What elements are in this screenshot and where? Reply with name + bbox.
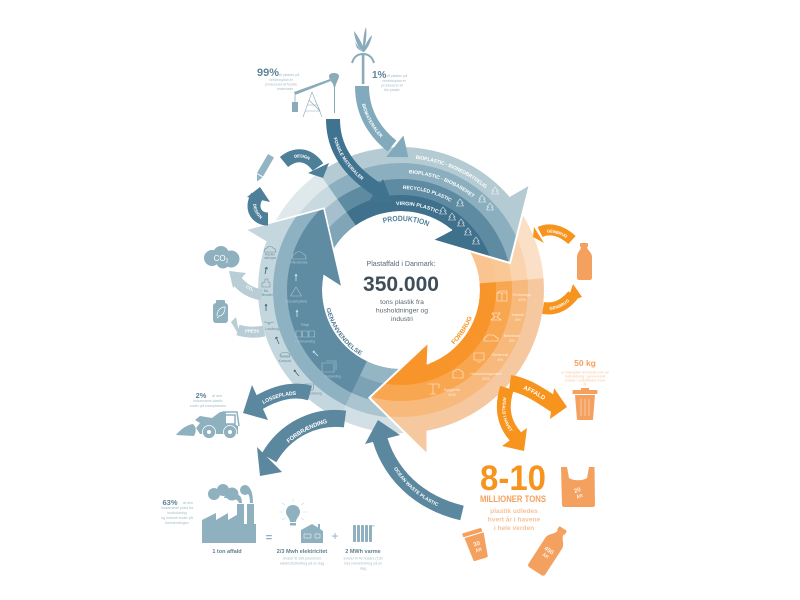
- icon: cup 30 years: [462, 527, 491, 562]
- icons and labels: forbrug sectors: Elektronik: [492, 353, 508, 357]
- arrow: fossile materialer: FOSSILE MATERIALER: [334, 137, 364, 180]
- icon: co2 cloud: [204, 246, 240, 268]
- icons and labels: forbrug sectors: Industri: [512, 313, 524, 317]
- arrow: genbrug bottom: GENBRUG: [550, 299, 570, 310]
- icons and labels: recycling outer band: raffinaderi: [259, 293, 273, 297]
- icons and labels: recycling outer band: Råolie/: [265, 252, 275, 256]
- icons and labels: recycling inner band: Råmateriale: [290, 260, 308, 264]
- icons and labels: recycling outer band: [259, 246, 322, 396]
- stat: 2 percent landfill: af den: [212, 394, 222, 398]
- center description: tons plastik fra: [380, 299, 424, 306]
- arrow: affald i havet: AFFALD I HAVET: [502, 397, 513, 432]
- label: heating: 2 MWh varme: [345, 549, 381, 555]
- icon: bottle 450 years: [527, 523, 572, 577]
- stat: 99 percent fossil: produceret af fossile: [265, 82, 297, 86]
- icon: trash can: [572, 388, 598, 420]
- icon: factory: [202, 484, 256, 543]
- icon: plastic bag 20 years: 20: [573, 487, 582, 495]
- stat: 63 percent incineration: og industri ender på: [161, 516, 193, 520]
- stat: 50 kg: smider i restaffaldet hvert: [565, 378, 605, 382]
- icons and labels: recycling inner band: Tilføje: [301, 323, 310, 327]
- stat: 63 percent incineration: husholdning: [167, 511, 187, 515]
- icons and labels: forbrug sectors: 8%: [515, 318, 521, 322]
- icon: plastic bag 20 years: [561, 467, 595, 507]
- stat: 50 kg: 50 kg: [574, 358, 596, 368]
- panel: genanvendelse arrow: [247, 207, 460, 433]
- icon: sugar cane: [352, 27, 374, 84]
- description: i hele verden: [494, 525, 534, 532]
- icon: gas canister: [213, 300, 228, 323]
- stat: 63 percent incineration: forbrændingen: [165, 521, 189, 525]
- stat: 1 percent bio: produceret af: [381, 84, 403, 88]
- stat: 63 percent incineration: [161, 498, 193, 525]
- arrow: affald: AFFALD: [523, 386, 546, 400]
- arrow: co2: CO₂: [246, 286, 254, 292]
- icons and labels: recycling inner band: Indsamling: [325, 374, 341, 378]
- panel: forbrug arrow: [368, 173, 544, 452]
- label: 1 ton affald: 1 ton affald: [212, 549, 242, 555]
- icon: light bulb: [279, 499, 307, 526]
- label: bioplastic bionedbrydelig: BIOPLASTIC - BIONEDBRYDELIG: [416, 155, 487, 188]
- stat: 50 kg: er mængden af plastik som en: [561, 370, 609, 374]
- stat: 63 percent incineration: 63%: [162, 498, 178, 507]
- circular lifecycle diagram: [247, 147, 544, 452]
- heading: produktion: PRODUKTION: [382, 216, 430, 226]
- center description: husholdninger og: [376, 308, 428, 314]
- icon: co2 cloud: CO: [214, 254, 226, 263]
- label: bioplastic biobaseret: BIOPLASTIC - BIOBASERET: [409, 170, 475, 197]
- stat: 1 percent bio: af plasten på: [387, 74, 407, 78]
- arrow: forbrænding: [257, 410, 346, 476]
- stat: 1 percent bio: verdensplan er: [382, 79, 407, 83]
- heading: genanvendelse: GENANVENDELSE: [326, 308, 363, 356]
- label: heating: [343, 549, 383, 570]
- label: heating: m2) varmeforbrug på en: [344, 562, 382, 566]
- icon: pencil: [257, 154, 274, 182]
- arrow: design left: [247, 187, 270, 226]
- arrow: press: PRESS: [245, 330, 259, 332]
- arrow: fossile materialer: [326, 119, 390, 200]
- arrow: affald i havet: [496, 386, 527, 451]
- icon: bottle 450 years: ÅR: [541, 551, 551, 560]
- icons and labels: forbrug sectors: Husholdningsvarer: [470, 372, 503, 376]
- stat: 2 percent landfill: indsamlede plastic: [193, 399, 223, 403]
- label: electricity: elektricitetforbrug på en dag: [280, 562, 324, 566]
- icons and labels: forbrug sectors: 22%: [482, 377, 490, 381]
- icon: cup 30 years: 30: [473, 541, 482, 549]
- icon: plastic bag 20 years: ÅR: [575, 492, 584, 500]
- subheading: MILLIONER TONS: [480, 494, 546, 504]
- icons and labels: forbrug sectors: Bilindustri: [504, 334, 520, 338]
- arrow: biomaterialer: [355, 86, 408, 158]
- stat: 63 percent incineration: indsamlede plast fra: [161, 506, 193, 510]
- description: hvert år i havene: [488, 516, 541, 524]
- icon: house: [301, 524, 323, 543]
- arrow: co2: [229, 271, 262, 300]
- icons and labels: recycling inner band: Granulat/pellets: [285, 300, 308, 304]
- icon: radiator: [353, 525, 374, 542]
- icon: bottle 450 years: 450: [543, 546, 555, 557]
- icons and labels: forbrug sectors: 6%: [509, 339, 515, 343]
- big number: 8-10: [480, 459, 546, 498]
- heading: forbrug: FORBRUG: [451, 316, 472, 344]
- arrow: design left: DESIGN: [253, 204, 262, 219]
- icon: co2 cloud: 2: [226, 258, 229, 264]
- stat: 8-10 million tons: [480, 459, 546, 532]
- stat: 99 percent fossil: 99%: [257, 67, 279, 79]
- arrow: press: [231, 317, 266, 338]
- stat: 1 percent bio: bio plastic: [384, 88, 400, 92]
- arrow: ocean waste plastic: [365, 420, 464, 520]
- label: electricity: 2/3 Mwh elektricitet: [277, 549, 327, 555]
- stat: 50 kg: [561, 358, 609, 386]
- stat: 2 percent landfill: ender på lossepladsen: [190, 404, 226, 408]
- arrow: affald: [509, 375, 567, 419]
- stat: 99 percent fossil: [257, 67, 299, 91]
- icon: wheel loader: [176, 412, 239, 438]
- icon: cup 30 years: ÅR: [474, 545, 483, 553]
- label: electricity: [277, 549, 327, 566]
- arrow: design top: DESIGN: [294, 154, 310, 160]
- icons and labels: forbrug sectors: Emballage: [513, 293, 531, 297]
- arrow: genbrug top: [533, 224, 576, 244]
- description: plastik udledes: [490, 508, 538, 515]
- center description: industri: [391, 316, 413, 323]
- icons and labels: forbrug sectors: [428, 291, 531, 397]
- stat: 50 kg: husholdning i gennemsnit: [565, 374, 605, 378]
- stat: 2 percent landfill: 2%: [196, 391, 207, 400]
- label: electricity: Svarer til 100 personers: [283, 556, 321, 560]
- arrow: design top: [280, 149, 329, 178]
- icons and labels: recycling inner band: Forbehandling: [295, 340, 315, 344]
- stat: 99 percent fossil: af plasten på: [279, 73, 299, 77]
- center statistic: [363, 259, 439, 323]
- production arrow tail: [258, 176, 356, 282]
- label: virgin plastic: VIRGIN PLASTIC: [396, 202, 439, 213]
- icons and labels: recycling outer band: Kompost: [279, 359, 291, 363]
- icons and labels: forbrug sectors: 4%: [497, 358, 503, 362]
- stat: 1 percent bio: [372, 70, 407, 92]
- arrow: forbrænding: FORBRÆNDING: [286, 419, 327, 443]
- icon: equals: =: [266, 532, 272, 544]
- label: heating: Svarer til 40 husars (130: [343, 556, 383, 560]
- label: heating: dag: [360, 566, 366, 570]
- center heading: Plastaffald i Danmark:: [366, 259, 436, 268]
- icons and labels: recycling outer band: Bio: [264, 289, 269, 293]
- stat: 2 percent landfill: [190, 391, 226, 408]
- arrow: genbrug bottom: [542, 284, 582, 314]
- icon: bottle: [577, 243, 592, 280]
- icon: oil pump: [292, 73, 339, 117]
- icons and labels: forbrug sectors: 40%: [518, 298, 526, 302]
- icon: plus: +: [331, 529, 339, 543]
- icons and labels: recycling outer band: naturgas: [264, 256, 277, 260]
- icons and labels: recycling outer band: Landbrug: [265, 327, 279, 331]
- icons: plastic band recycling marks: [440, 187, 498, 244]
- panel: produktion arrow: [322, 147, 528, 264]
- icons and labels: recycling outer band: Sortering: [309, 392, 322, 396]
- stat: 50 kg: år: [583, 382, 587, 386]
- stat: 1 percent bio: 1%: [372, 70, 387, 81]
- arrow: losseplads: [243, 384, 312, 420]
- arrow: genbrug top: GENBRUG: [547, 230, 568, 238]
- icons and labels: forbrug sectors: 20%: [448, 393, 456, 397]
- icons and labels: recycling inner band: [285, 252, 341, 378]
- stat: 63 percent incineration: af den: [183, 501, 193, 505]
- stat: 99 percent fossil: materialer: [277, 87, 294, 91]
- icons and labels: forbrug sectors: Byggeriet: [444, 388, 461, 392]
- arrow: losseplads: LOSSEPLADS: [262, 391, 296, 404]
- label: recycled plastic: RECYCLED PLASTIC: [403, 186, 452, 202]
- big number: 350.000: [363, 273, 439, 296]
- stat: 99 percent fossil: verdensplan er: [269, 78, 294, 82]
- arrow: ocean waste plastic: OCEAN WASTE PLASTIC: [394, 467, 438, 506]
- arrow: biomaterialer: BIOMATERIALER: [362, 104, 382, 138]
